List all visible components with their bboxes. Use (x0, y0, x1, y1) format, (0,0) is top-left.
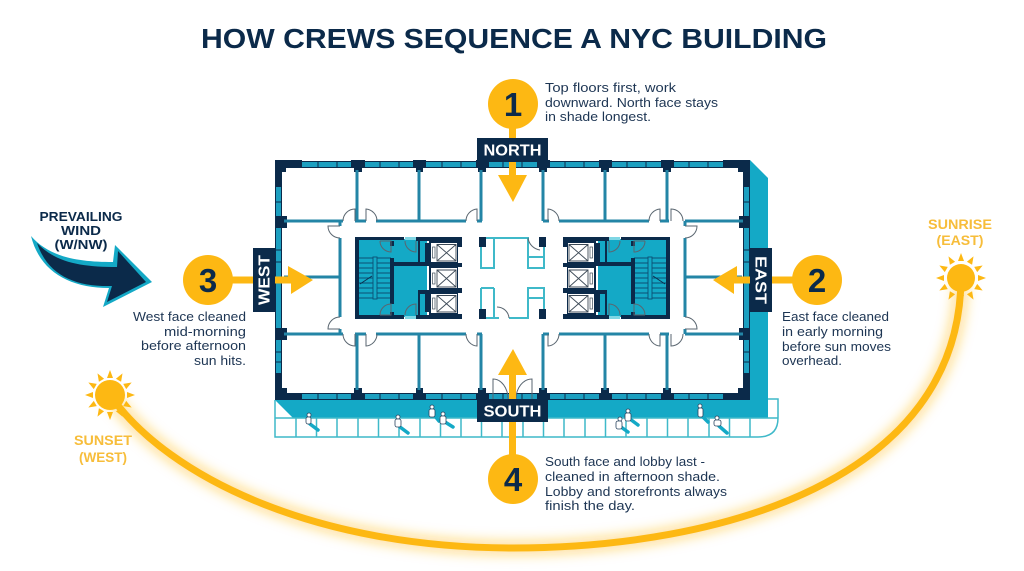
step 4 text: Lobby and storefronts always (545, 485, 727, 499)
step 1: north marker (477, 79, 548, 202)
step 3 text: mid-morning (164, 325, 246, 339)
sunset label: SUNSET (74, 433, 133, 448)
icon: sunset (85, 370, 135, 420)
step 4 text: finish the day. (545, 499, 635, 513)
step 2 text: East face cleaned (782, 310, 889, 324)
sunrise label: (EAST) (936, 233, 984, 248)
terrace and paving (275, 160, 778, 437)
icon: wind arrow (31, 236, 152, 307)
sunrise label (928, 217, 992, 248)
step 4 text: South face and lobby last - (545, 455, 705, 469)
south label (477, 399, 548, 422)
icon: sunrise (936, 253, 986, 303)
floor plan (275, 160, 778, 437)
interior partition walls (284, 170, 743, 390)
sunset label (74, 433, 133, 465)
wind label: (W/NW) (54, 238, 108, 252)
doors (328, 209, 697, 399)
step 3: west marker: 3 (199, 262, 217, 299)
east core (563, 237, 670, 319)
step 3: west marker (183, 248, 313, 312)
exterior walls and windows (275, 160, 750, 400)
step 1 text: Top floors first, work (545, 81, 677, 95)
sunrise label: SUNRISE (928, 217, 992, 232)
wind label: PREVAILING (40, 210, 122, 224)
sunset label: (WEST) (79, 450, 127, 465)
step 4: south marker (477, 349, 548, 504)
north label: NORTH (484, 142, 542, 160)
step 1 text: in shade longest. (545, 110, 651, 124)
west label: WEST (256, 255, 274, 305)
step 2: east marker: 2 (808, 262, 826, 299)
east label: EAST (752, 256, 768, 304)
step 3 text: sun hits. (194, 354, 246, 368)
south label: SOUTH (484, 404, 542, 420)
step 2 text (782, 310, 891, 368)
west core (355, 237, 462, 319)
wind label: WIND (61, 224, 101, 238)
step 2 text: before sun moves (782, 340, 891, 354)
wind label (40, 210, 122, 252)
central restrooms (479, 237, 546, 319)
elevators (429, 241, 462, 319)
sun path arc (110, 278, 961, 548)
step 2 text: overhead. (782, 354, 842, 368)
step 4 text (545, 455, 727, 513)
step 3 text (133, 310, 246, 368)
step 4 text: cleaned in afternoon shade. (545, 470, 720, 484)
step 2: east marker (713, 248, 842, 312)
step 1 text (545, 81, 718, 124)
title: HOW CREWS SEQUENCE A NYC BUILDING (201, 23, 827, 54)
step 3 text: West face cleaned (133, 310, 246, 324)
pedestrians (306, 404, 727, 433)
step 1 text: downward. North face stays (545, 96, 718, 110)
step 3 text: before afternoon (141, 339, 246, 353)
building interior (280, 165, 746, 396)
stairs (359, 257, 391, 299)
step 4: south marker: 4 (504, 461, 523, 498)
step 1: north marker: 1 (504, 86, 522, 123)
step 2 text: in early morning (782, 325, 883, 339)
